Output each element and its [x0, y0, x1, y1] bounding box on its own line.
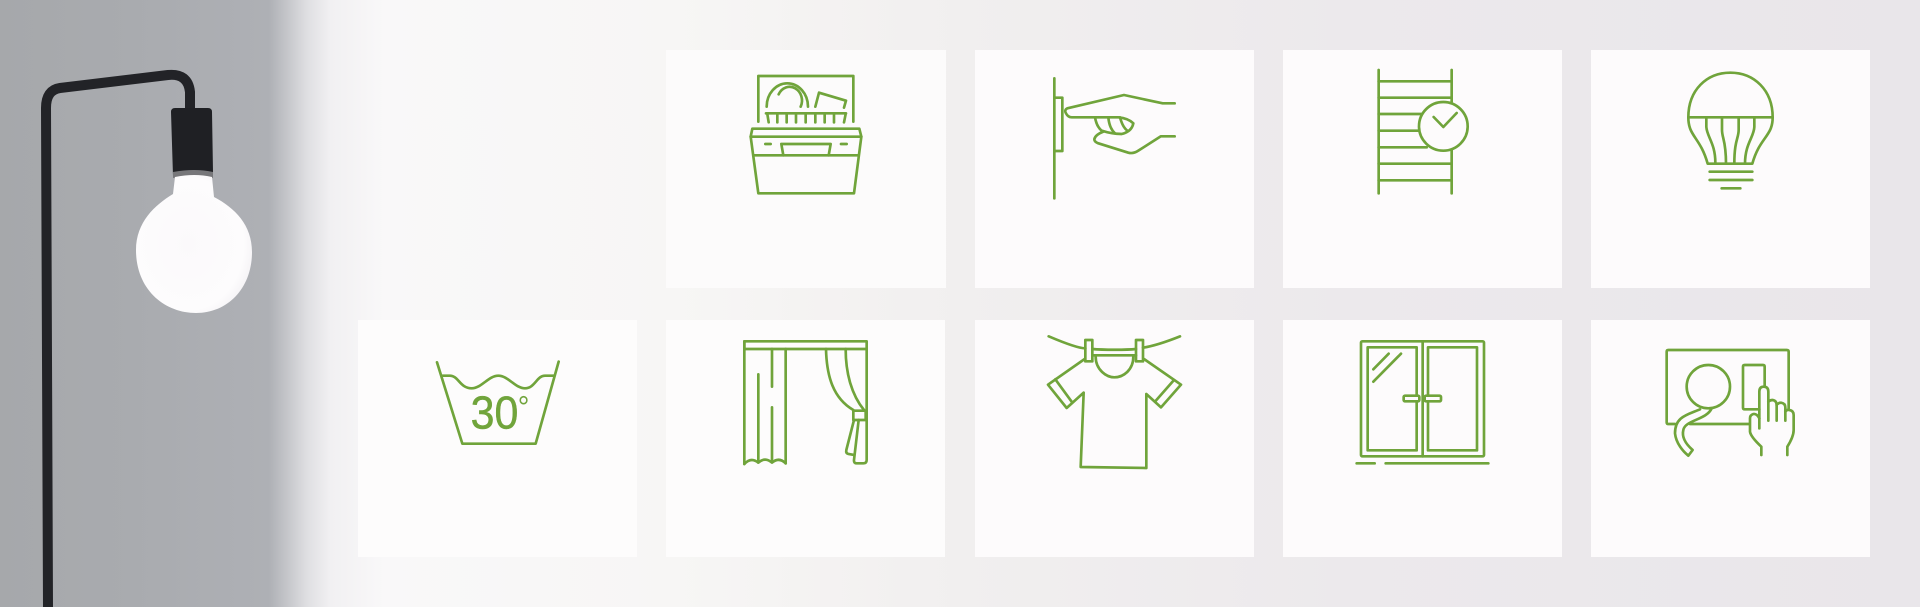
panel: LED bulb — [1591, 50, 1870, 288]
lamp stem and arm — [46, 75, 190, 607]
icon: curtains — [744, 341, 867, 464]
panel: wash at 30 degrees — [358, 320, 637, 557]
light bulb — [136, 175, 252, 313]
panel: thermostat control — [1591, 320, 1870, 557]
panel: line-drying shirt — [975, 320, 1254, 557]
panel: finger pressing switch — [975, 50, 1254, 288]
icon: dishwasher — [751, 76, 861, 193]
panel: blinds with timer — [1283, 50, 1562, 288]
panel: curtains — [666, 320, 945, 557]
icon: finger pressing switch — [1054, 78, 1175, 198]
icon: hand on thermostat — [1667, 350, 1794, 456]
icon: LED bulb — [1688, 73, 1773, 188]
panel: window — [1283, 320, 1562, 557]
icon: closed window — [1357, 341, 1488, 463]
icon: washing tub 30 degrees: ° — [518, 390, 529, 425]
floor lamp — [46, 75, 252, 607]
icon: shirt on clothesline — [1048, 336, 1181, 468]
lamp socket — [171, 108, 213, 178]
panel: dishwasher — [666, 50, 946, 288]
icon: washing tub 30 degrees — [437, 362, 559, 444]
icon: washing tub 30 degrees: 30 — [471, 386, 518, 439]
icon: blinds with timer — [1379, 70, 1468, 193]
